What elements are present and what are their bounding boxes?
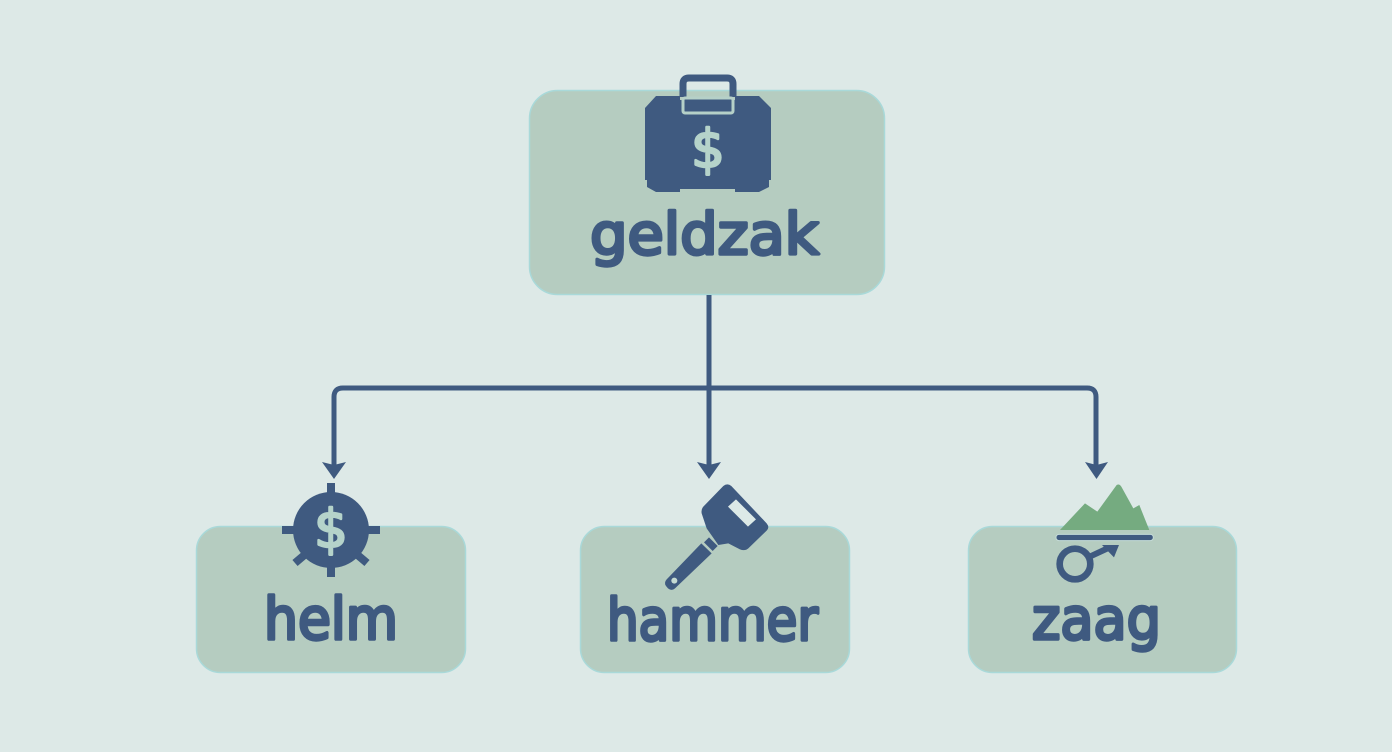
panel: hammer	[580, 484, 850, 672]
label: helm: helm	[264, 585, 398, 653]
icon: briefcase with dollar sign	[645, 78, 771, 192]
panel: helm	[196, 483, 466, 672]
label: geldzak: geldzak	[590, 202, 819, 268]
panel: zaag	[968, 484, 1236, 672]
icon: mountain and saw	[1056, 484, 1153, 579]
icon: hammer	[665, 484, 768, 590]
icon: helm with dollar sign: $	[314, 499, 348, 560]
icon: helm with dollar sign	[282, 483, 380, 577]
label: zaag: zaag	[1032, 585, 1161, 653]
panel: geldzak	[530, 78, 884, 294]
arrows: connector tree	[322, 295, 1108, 479]
label: hammer: hammer	[607, 586, 818, 654]
icon: briefcase with dollar sign: $	[691, 119, 725, 180]
